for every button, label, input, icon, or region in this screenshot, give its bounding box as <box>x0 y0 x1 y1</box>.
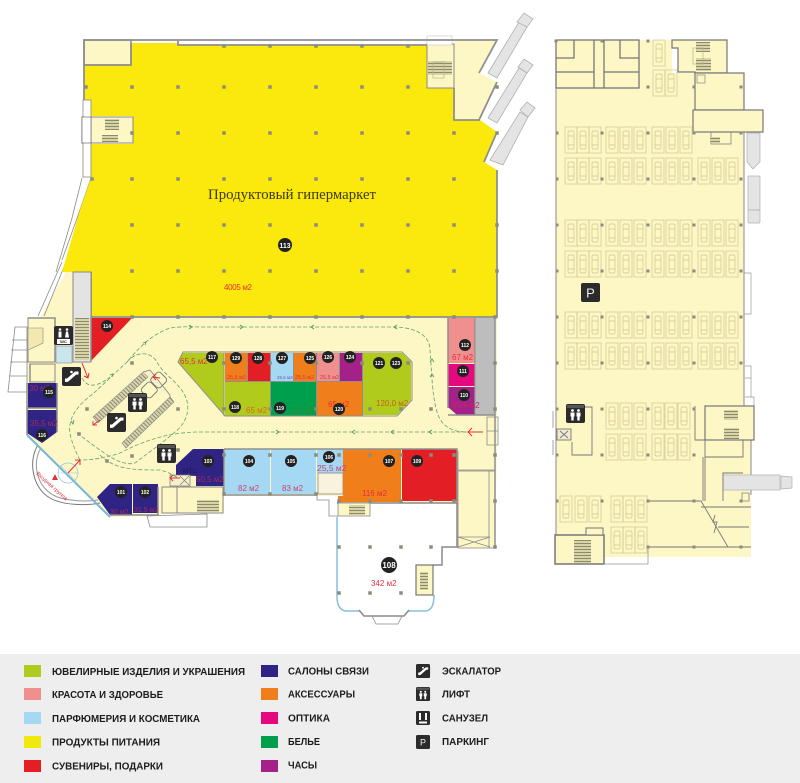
unit number badges: 115 <box>45 390 53 396</box>
area labels: 25,5 м2 <box>277 375 293 380</box>
hypermarket walls <box>84 40 497 317</box>
area labels: МТС <box>183 468 197 475</box>
parking columns <box>556 41 741 547</box>
unit number badges: 128 <box>254 356 262 362</box>
columns <box>79 46 497 593</box>
unit number badges: 120 <box>335 407 343 413</box>
visitor routes <box>69 327 467 478</box>
shop 107 <box>338 449 401 502</box>
panel: legend <box>0 654 800 783</box>
stair 107 <box>317 494 370 516</box>
parking spaces <box>560 40 738 553</box>
shop 117 <box>178 353 225 416</box>
icon: escalator near restroom <box>62 367 81 386</box>
area labels: 50,5 м2 <box>196 475 224 484</box>
legend column: symbols: P <box>420 738 426 748</box>
unit number badges: 113 <box>279 243 291 250</box>
legend column: symbols: ПАРКИНГ <box>442 737 489 748</box>
area labels: 35,5 м2 <box>30 419 58 428</box>
unit number badges: 119 <box>276 406 284 412</box>
area labels: 30 м2 <box>29 384 51 393</box>
legend column: shop categories 1: ПРОДУКТЫ ПИТАНИЯ <box>52 738 160 748</box>
parking floor <box>556 40 754 557</box>
technical room <box>318 473 343 494</box>
area labels: 120,0 м2 <box>376 399 409 408</box>
icon: escalator in atrium <box>107 413 126 432</box>
shop 114 <box>91 318 132 361</box>
route direction chevrons <box>71 325 434 434</box>
right block <box>458 417 498 548</box>
panel: hypermarket <box>62 43 497 317</box>
rooms at top of parking <box>556 40 639 88</box>
hypermarket title: Продуктовый гипермаркет <box>208 187 376 203</box>
area labels: 116 м2 <box>362 489 387 498</box>
icon: lift in atrium <box>128 393 147 412</box>
shop 103 <box>176 449 224 486</box>
unit number badges: 126 <box>324 355 332 361</box>
side trucks <box>723 133 792 490</box>
main entrance label: Входная группа <box>35 471 69 503</box>
unit number badges: 127 <box>278 356 286 362</box>
unit number badges: 123 <box>392 361 400 367</box>
legend column: shop categories 2: САЛОНЫ СВЯЗИ <box>288 666 369 678</box>
legend column: shop categories 1: ЮВЕЛИРНЫЕ ИЗДЕЛИЯ И УКРАШЕНИЯ <box>52 667 245 678</box>
entrance marker <box>52 474 58 480</box>
unit number badges: 105 <box>287 459 295 465</box>
stair block lower right of parking <box>695 406 754 501</box>
escalators and central atrium <box>93 370 174 448</box>
legend column: symbols: САНУЗЕЛ <box>442 714 488 724</box>
unit number badges: 125 <box>306 356 314 362</box>
area labels: 25,5 м2 <box>317 463 347 473</box>
stair room left <box>82 100 133 177</box>
area labels: 65 м2 <box>328 400 350 409</box>
unit number badges: 112 <box>461 343 469 349</box>
hypermarket area: 4005 м2 <box>224 283 253 292</box>
shops 115 and 116 <box>27 383 57 443</box>
unit number badges: 109 <box>413 459 421 465</box>
panel: parking <box>553 40 792 564</box>
legend column: symbols: ЭСКАЛАТОР <box>442 666 501 678</box>
unit number badges: 106 <box>325 455 333 461</box>
unit number badges: 116 <box>38 433 46 439</box>
legend column: shop categories 2: ОПТИКА <box>288 714 330 724</box>
red flow arrows <box>68 363 483 481</box>
area labels: 25,5 м2 <box>320 375 339 381</box>
island shops <box>178 352 412 416</box>
area labels: 31,5 м2 <box>134 507 158 514</box>
outer walls <box>27 317 495 548</box>
area labels: 30 м2 <box>110 509 129 516</box>
service room <box>693 73 763 144</box>
unit number badges: 121 <box>375 361 383 367</box>
unit number badges: 108 <box>382 561 396 570</box>
unit number badges: 117 <box>208 355 216 361</box>
shops 104 to 106 <box>225 449 343 494</box>
unit number badges: 111 <box>459 369 467 375</box>
unit number badges: 101 <box>117 490 125 496</box>
unit number badges: 124 <box>346 355 354 361</box>
icon: parking lift <box>566 404 585 423</box>
right shops 110 to 112 <box>448 318 495 415</box>
main entrance with arcs <box>27 435 110 517</box>
unit number badges: 104 <box>245 459 253 465</box>
legend column: shop categories 2: ЧАСЫ <box>288 760 317 772</box>
unit number badges <box>36 238 471 573</box>
unit number badges: 102 <box>141 490 149 496</box>
legend column: symbols: ЛИФТ <box>442 690 470 700</box>
unit number badges: 107 <box>385 459 393 465</box>
pale back room of the hypermarket <box>454 40 497 120</box>
legend column: shop categories 2: АКСЕССУАРЫ <box>288 690 355 700</box>
area labels: 25,5 м2 <box>295 375 314 381</box>
area labels: 65,5 м2 <box>452 401 480 410</box>
area labels: 65 м2 <box>294 406 316 415</box>
unit number badges: 114 <box>103 324 111 330</box>
area labels <box>29 353 480 588</box>
unit number badges: 103 <box>204 459 212 465</box>
legend column: shop categories 1: СУВЕНИРЫ, ПОДАРКИ <box>52 762 163 772</box>
legend column: shop categories 1: ПАРФЮМЕРИЯ И КОСМЕТИКА <box>52 714 200 725</box>
parking outer walls <box>556 88 751 535</box>
lower stair room <box>147 475 223 527</box>
shops 101 and 102 <box>97 484 158 515</box>
trucks at loading docks <box>488 13 535 165</box>
outside stairs and ramp <box>8 178 91 392</box>
area labels: 83 м2 <box>282 484 304 493</box>
legend column: shop categories 2: БЕЛЬЕ <box>288 737 320 748</box>
area labels: 82 м2 <box>238 484 260 493</box>
unit number badges: 118 <box>231 405 239 411</box>
lift room in parking <box>553 407 592 455</box>
legend column: symbols <box>416 664 501 749</box>
mall floor base <box>27 272 497 548</box>
unit number badges: 129 <box>232 356 240 362</box>
shop 109 <box>402 449 457 501</box>
unit number badges: 110 <box>460 393 468 399</box>
panel: main floor plan <box>8 13 535 624</box>
parking ramp <box>648 493 751 547</box>
area labels: 65,5 м2 <box>180 357 208 366</box>
area labels: 65 м2 <box>246 406 268 415</box>
side compartments <box>744 273 754 407</box>
left wing rooms <box>28 272 91 382</box>
pale service room top left <box>84 40 131 65</box>
icon: restroom: WC <box>60 339 67 344</box>
icon: parking P <box>581 283 600 302</box>
stair block bottom left of parking <box>555 528 648 564</box>
icon: restroom <box>54 326 73 345</box>
hypermarket entrance 108 area <box>337 503 457 624</box>
area labels: 25,5 м2 <box>227 375 246 381</box>
icon: lift near 103 <box>157 444 176 463</box>
legend column: shop categories 2 <box>261 665 369 772</box>
area labels: 67 м2 <box>452 353 474 362</box>
stair block top right of parking <box>672 40 727 73</box>
legend column: shop categories 1 <box>24 665 245 772</box>
legend background <box>0 654 800 783</box>
area labels: 342 м2 <box>371 579 397 588</box>
icon: parking P: P <box>586 286 595 300</box>
legend column: shop categories 1: КРАСОТА И ЗДОРОВЬЕ <box>52 690 163 701</box>
stair room top right <box>427 36 454 88</box>
